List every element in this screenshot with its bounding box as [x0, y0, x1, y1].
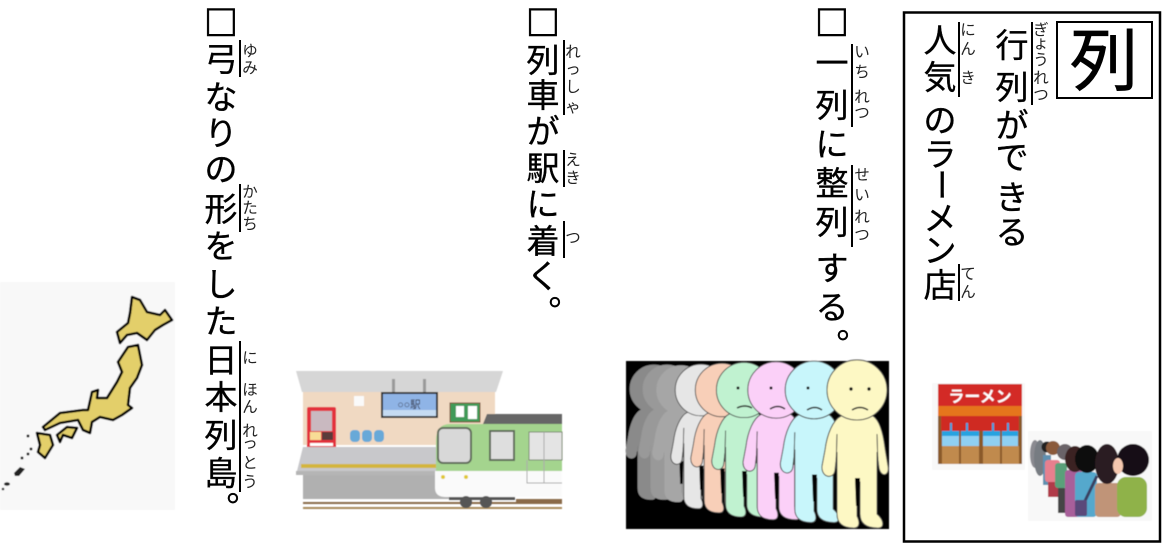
text column: 列車が駅に着く。	[526, 0, 582, 312]
image: queue of people	[1028, 431, 1152, 521]
image: ramen shop	[932, 383, 1025, 470]
text column: 弓なりの形をした日本列島。: にほんれっとう	[242, 350, 258, 491]
panel: people in a line image	[626, 360, 889, 529]
bag	[1083, 476, 1097, 505]
text column: 列車が駅に着く。: つ	[565, 230, 581, 247]
panel: Japan map image	[0, 282, 175, 510]
shop sign text: ラーメン	[948, 389, 1012, 406]
reading lines	[851, 44, 853, 247]
back figures	[1030, 440, 1040, 468]
long vowel mark: ー	[922, 168, 958, 202]
furigana: いちれつ	[854, 44, 870, 122]
furigana: れっしゃ	[565, 44, 581, 116]
text column: 一列に整列する。	[816, 0, 870, 345]
platform	[296, 447, 450, 475]
sentence: 行列ができる: 行列ができる	[996, 27, 1028, 251]
faces	[736, 386, 871, 391]
text column: 弓なりの形をした日本列島。: かたち	[242, 184, 258, 233]
train body	[436, 424, 562, 471]
panel: train station image: ○○駅	[397, 399, 421, 411]
main sentence: 弓なりの形をした日本列島。	[204, 41, 260, 508]
station roof	[296, 371, 503, 392]
map: southern islands	[2, 434, 32, 490]
station wall	[303, 390, 495, 445]
tracks	[303, 502, 562, 504]
furigana: ゆみ	[242, 42, 258, 77]
main sentence: 一列に整列する。	[816, 45, 870, 345]
panel: train station image	[296, 371, 562, 509]
panel: outer frame with kanji card: てん	[960, 266, 976, 301]
reading lines	[239, 40, 241, 492]
benches	[350, 430, 384, 442]
text column: 列車が駅に着く。: えき	[565, 152, 581, 187]
furigana: ぎょうれつ: ぎょうれつ	[1033, 21, 1049, 104]
frame	[904, 12, 1160, 542]
main sentence: 列車が駅に着く。	[526, 42, 582, 312]
text column: 一列に整列する。: せいれつ	[854, 167, 870, 244]
map: Hokkaido	[117, 297, 172, 343]
vending machine	[307, 407, 336, 449]
kanji box	[1057, 22, 1152, 100]
reading lines	[563, 40, 565, 258]
map: Kyushu	[37, 433, 53, 458]
station sign	[382, 393, 437, 417]
panel: outer frame with kanji card	[904, 12, 1160, 542]
clock	[354, 396, 364, 406]
train windows	[438, 428, 471, 463]
furigana: にんき, てん: にんき	[960, 22, 976, 87]
sentence: 人気のラ: 人気のラ	[924, 22, 956, 173]
figures, back to front	[626, 365, 679, 499]
kanji: 列	[1070, 24, 1138, 100]
map: Honshu	[43, 345, 142, 433]
sentence: メン店: メン店	[924, 200, 956, 304]
map: Shikoku	[57, 427, 77, 442]
notice board	[450, 403, 480, 422]
train roof	[483, 414, 562, 424]
train wheels	[449, 497, 515, 500]
text column: 弓なりの形をした日本列島。	[204, 0, 260, 508]
